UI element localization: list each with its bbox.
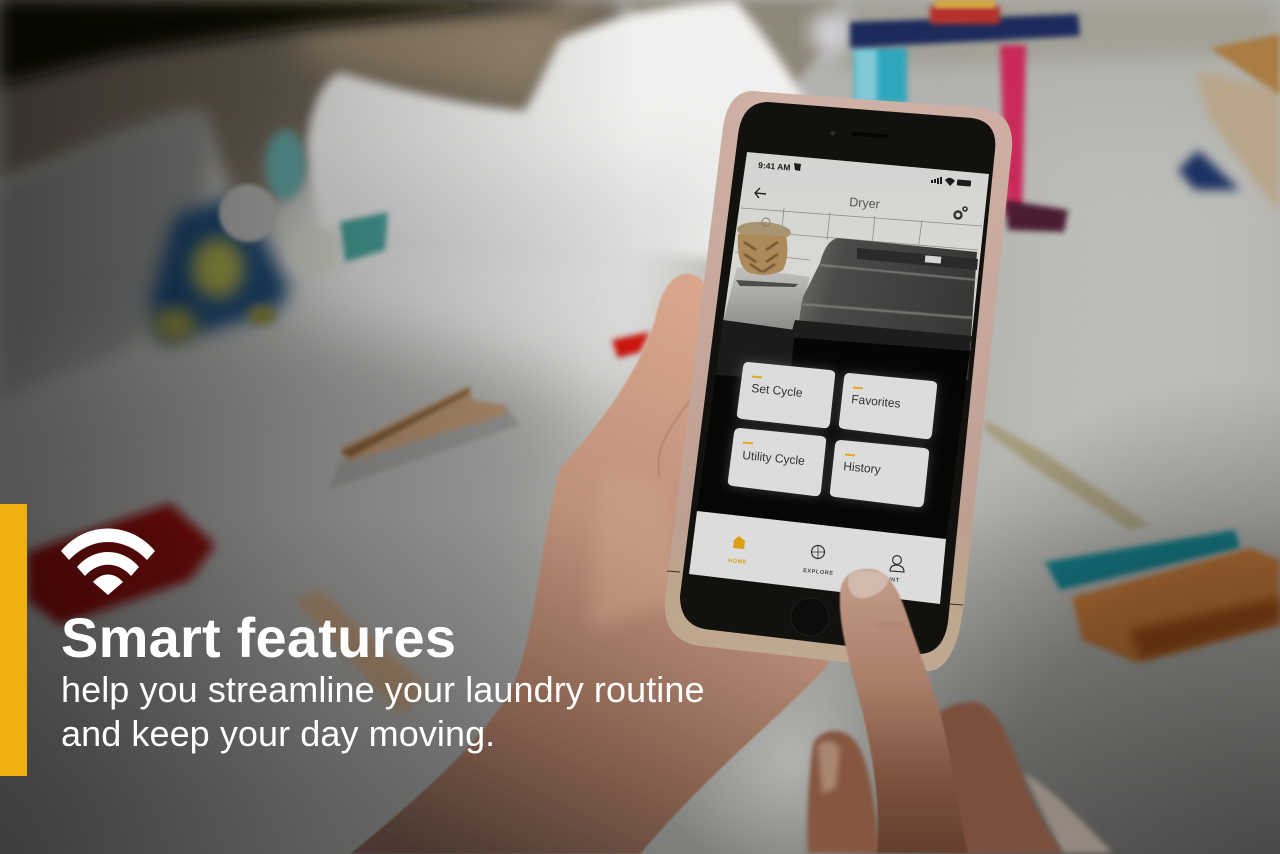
phone black front	[680, 102, 995, 654]
blurred toys on the left	[150, 130, 388, 345]
dryer illustration	[785, 238, 978, 395]
home button	[791, 598, 829, 636]
screen title: Dryer	[849, 195, 880, 211]
out of focus fingers, lower right	[807, 702, 1113, 853]
status bar: 9:41 AM	[758, 160, 791, 173]
status bar	[758, 160, 971, 187]
nav: home	[728, 536, 747, 566]
card glow	[728, 362, 937, 507]
phone case	[665, 91, 1012, 671]
card: Favorites	[839, 373, 937, 439]
hand holding the phone: palm and wrist	[350, 274, 830, 854]
app bottom navigation	[689, 511, 946, 604]
card: Set Cycle	[737, 362, 835, 428]
counter	[723, 267, 810, 332]
black lower screen	[697, 330, 970, 539]
body text	[61, 669, 705, 754]
blurred colored toy tower at top right	[810, 0, 1080, 232]
nav: account	[868, 556, 904, 584]
icon: wifi	[61, 528, 155, 595]
pointing index finger	[840, 569, 968, 853]
earpiece and camera	[830, 130, 888, 138]
dark cabinet	[716, 320, 795, 380]
body text: help you streamline your laundry routine	[61, 669, 705, 710]
wall tile lines	[735, 208, 982, 260]
accent bar	[0, 504, 27, 776]
nav: explore: EXPLORE	[803, 568, 834, 577]
card: History: History	[843, 459, 881, 477]
basket	[736, 218, 798, 287]
body text: and keep your day moving.	[61, 713, 495, 754]
back arrow	[755, 188, 766, 198]
phone case seam lines	[667, 571, 963, 605]
card: Utility Cycle	[728, 428, 826, 496]
nav: explore	[803, 546, 834, 577]
screen header photo	[722, 152, 989, 352]
card: Set Cycle: Set Cycle	[751, 381, 803, 400]
card: History	[830, 440, 929, 507]
blurred basket at far right	[1178, 34, 1280, 215]
blurred wooden clothespin	[328, 385, 520, 490]
blurred colored blocks	[27, 332, 1280, 715]
phone	[665, 91, 1012, 671]
nav: home: HOME	[728, 558, 747, 566]
nav: account: ACCOUNT	[868, 575, 900, 584]
gear icon	[954, 207, 967, 218]
card: Utility Cycle: Utility Cycle	[742, 448, 806, 468]
card: Favorites: Favorites	[851, 392, 901, 411]
heading: Smart features	[61, 606, 456, 669]
